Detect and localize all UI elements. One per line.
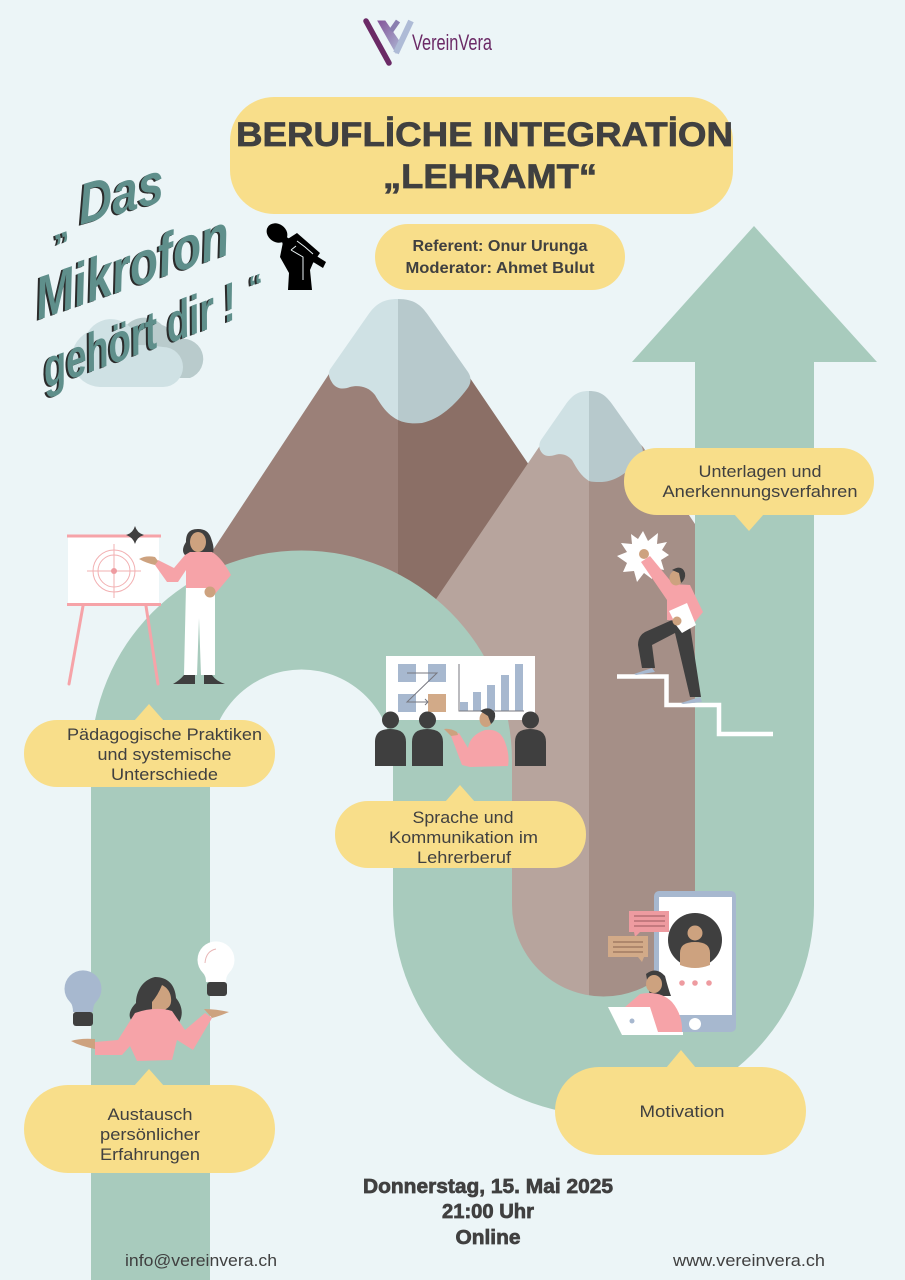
speakers pill: Moderator: Ahmet Bulut: [406, 260, 595, 277]
teacher: [139, 529, 231, 684]
cloud: [72, 318, 203, 387]
bubble: Motivation: Motivation: [640, 1103, 724, 1121]
easel: [67, 526, 161, 684]
contact website: www.vereinvera.ch: [672, 1251, 825, 1270]
bubble: Motivation: [555, 1050, 806, 1155]
speakers pill: Referent: Onur Urunga: [412, 238, 588, 255]
bubble: Austausch: Erfahrungen: [100, 1146, 200, 1164]
burst: [617, 531, 669, 582]
slogan: Das Mikrofon gehört dir: [32, 149, 268, 400]
slogan: Das Mikrofon gehört dir: “: [244, 269, 268, 305]
presentation board: [386, 656, 535, 720]
slogan: Das Mikrofon gehört dir: Mikrofon: [32, 201, 232, 333]
logo: VereinVera: [412, 30, 493, 55]
bubble: Unterlagen: Anerkennungsverfahren: [662, 483, 858, 501]
event date and place: Donnerstag, 15. Mai 2025: [363, 1176, 613, 1198]
event date and place: [363, 1176, 613, 1249]
illustration: woman with light bulbs: [64, 941, 234, 1061]
snow cap: small mountain: [539, 391, 643, 482]
bubble: Austausch: Austausch: [108, 1106, 192, 1124]
road: winding green path with arrow: [91, 226, 877, 1280]
blue bulb: [64, 970, 102, 1026]
phone: [654, 891, 736, 1032]
presenter: [444, 708, 509, 767]
slogan: Das Mikrofon gehört dir: „: [44, 206, 74, 248]
title banner: [230, 97, 733, 214]
icon: fist with microphone: [263, 219, 326, 290]
illustration: phone and chat: [608, 891, 736, 1035]
snow cap: large mountain: [329, 299, 471, 423]
slogan: Das Mikrofon gehört dir: gehört dir !: [39, 271, 239, 400]
bubble: Austausch: [24, 1069, 275, 1173]
bubble: Sprache und Kommunikation: Sprache und: [412, 809, 514, 827]
audience: [375, 712, 546, 766]
bubble: Unterlagen: Unterlagen und: [698, 463, 822, 481]
illustration: climbing stairs: [617, 531, 773, 734]
bubble: Austausch: persönlicher: [100, 1126, 201, 1144]
woman: [71, 977, 229, 1061]
bubble: Unterlagen: [624, 448, 874, 531]
white bulb: [198, 941, 234, 996]
title banner: BERUFLİCHE INTEGRATİON: [236, 116, 733, 154]
mountain: large: [180, 299, 560, 640]
illustration: presentation to audience: [375, 656, 546, 767]
stairs: [617, 676, 773, 734]
bubble: Sprache und Kommunikation: Kommunikation im: [389, 829, 538, 847]
bubble: Pädagogische Praktiken: Unterschiede: [111, 766, 218, 784]
bubble: Sprache und Kommunikation: [335, 785, 586, 868]
event date and place: Online: [456, 1227, 520, 1249]
event date and place: 21:00 Uhr: [442, 1201, 534, 1223]
bubble: Pädagogische Praktiken: Pädagogische Praktiken: [67, 726, 262, 744]
bubble: Pädagogische Praktiken: [24, 704, 275, 787]
title banner: „LEHRAMT“: [383, 158, 597, 196]
mountain: small: [430, 391, 695, 1000]
chat bubbles: [608, 911, 669, 962]
contact email: info@vereinvera.ch: [125, 1251, 277, 1270]
illustration: teacher at easel: [67, 526, 231, 684]
slogan: Das Mikrofon gehört dir: Das: [76, 149, 165, 237]
climber: [634, 549, 703, 704]
speakers pill: [375, 224, 625, 290]
bubble: Pädagogische Praktiken: und systemische: [98, 746, 232, 764]
woman with laptop: [608, 970, 683, 1035]
logo: [366, 21, 493, 63]
bubble: Sprache und Kommunikation: Lehrerberuf: [417, 849, 511, 867]
